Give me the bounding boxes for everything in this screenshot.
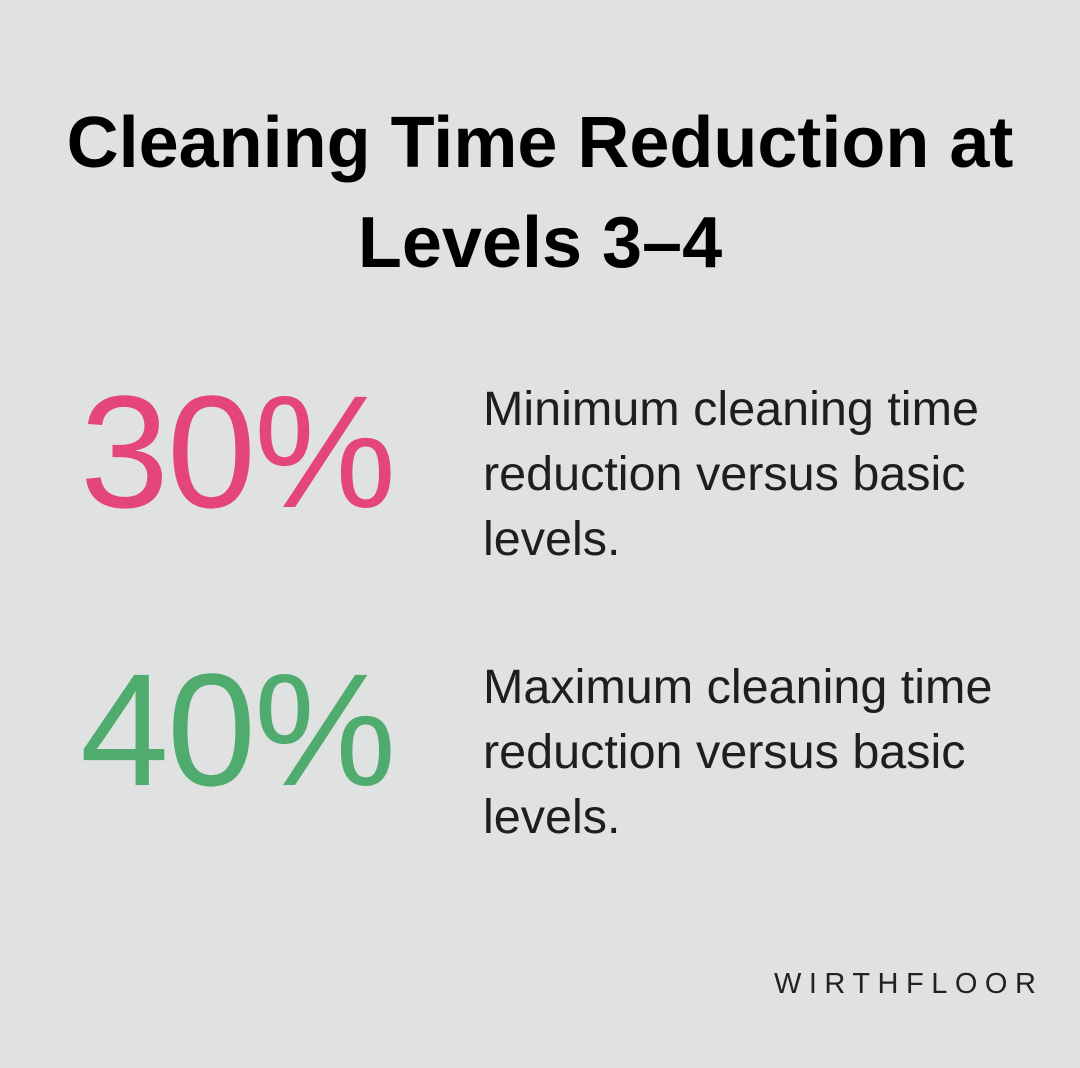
text: maximum reduction: reduction versus basic bbox=[483, 725, 966, 779]
brand logo: WIRTHFLOOR bbox=[774, 968, 1043, 1000]
text: minimum reduction bbox=[483, 382, 979, 566]
text: minimum reduction: reduction versus basic bbox=[483, 447, 966, 501]
title: Levels 3–4 bbox=[358, 203, 722, 283]
title: Cleaning Time Reduction at bbox=[67, 103, 1013, 183]
text: maximum reduction: Maximum cleaning time bbox=[483, 660, 992, 714]
stat: 40%: 40% bbox=[80, 640, 394, 819]
title bbox=[67, 103, 1013, 283]
text: maximum reduction bbox=[483, 660, 992, 844]
text: maximum reduction: levels. bbox=[483, 790, 620, 844]
stat: 30%: 30% bbox=[80, 362, 394, 541]
text: minimum reduction: Minimum cleaning time bbox=[483, 382, 979, 436]
text: minimum reduction: levels. bbox=[483, 512, 620, 566]
